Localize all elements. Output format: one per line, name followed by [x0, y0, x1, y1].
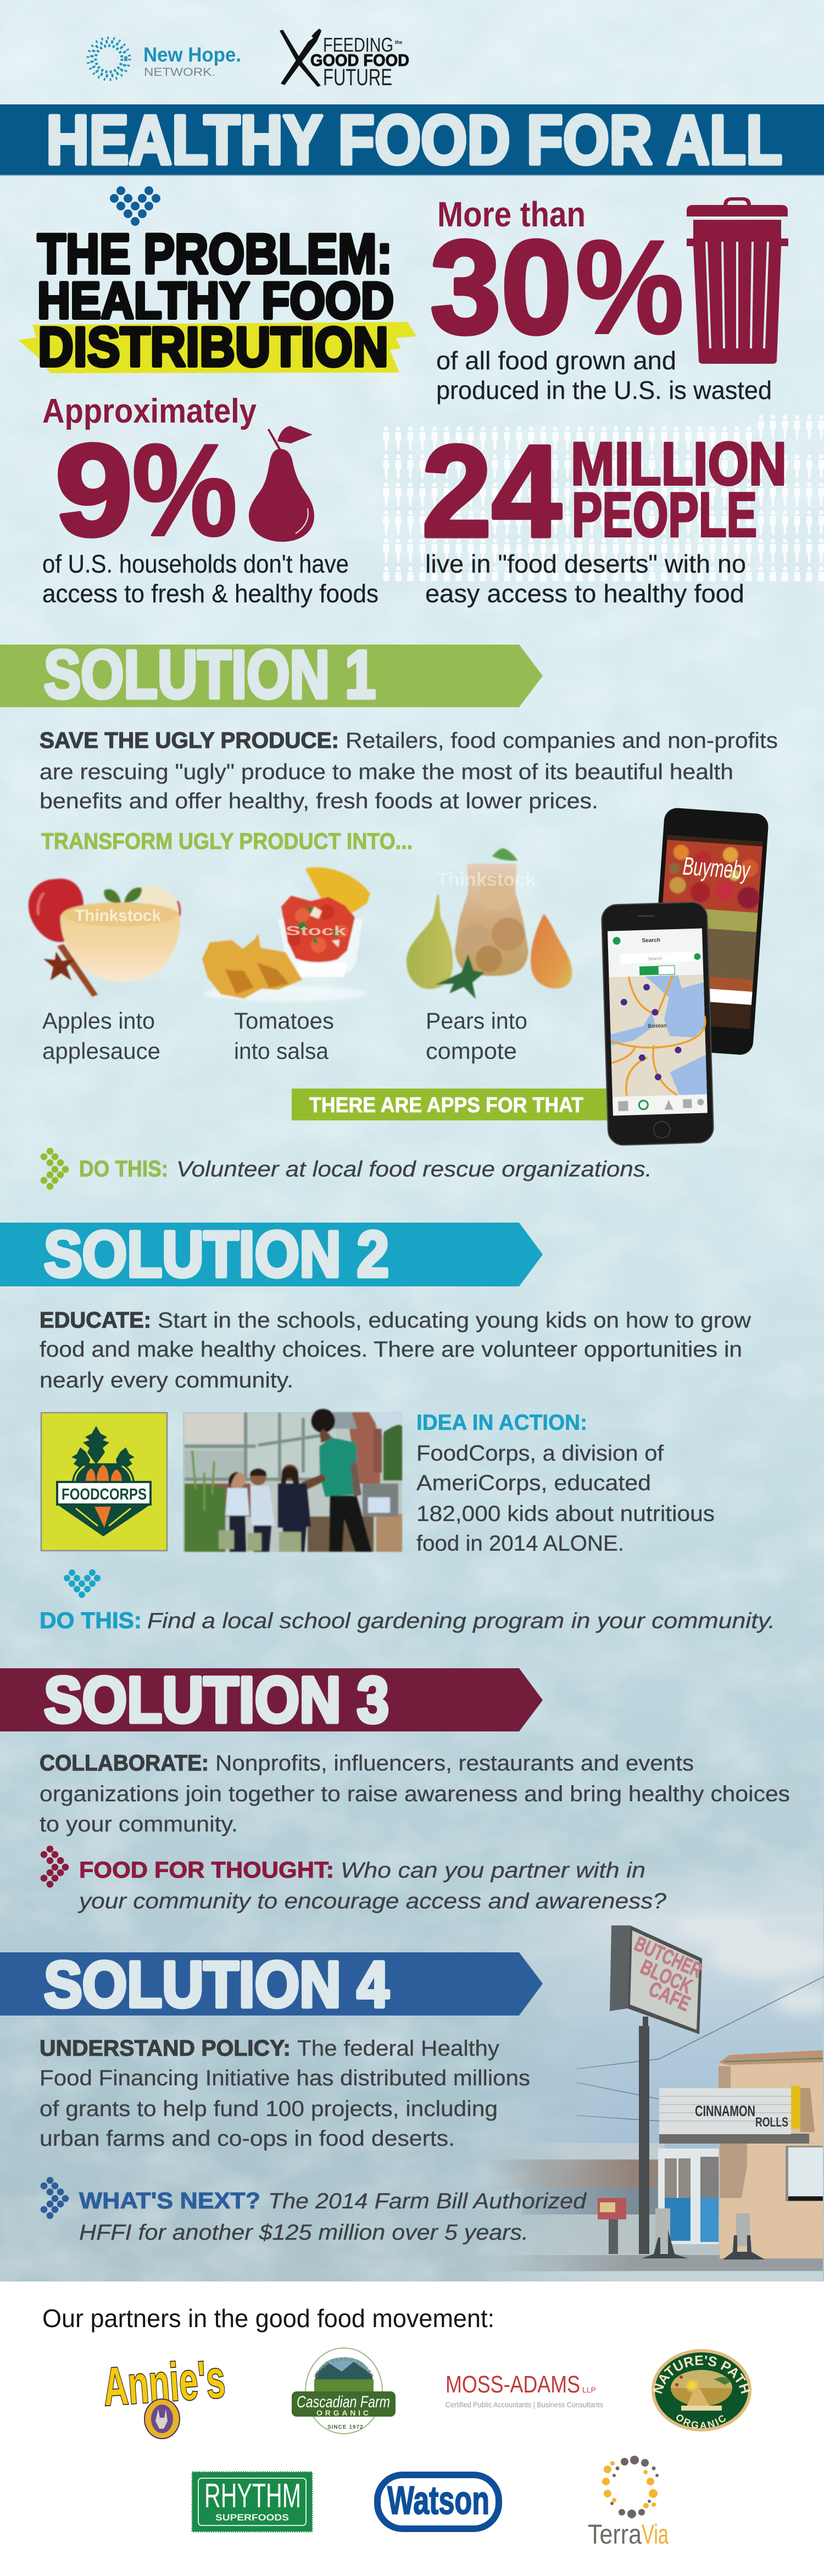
- cafe sign: CAFE: [645, 1978, 694, 2016]
- body text: urban farms and co-ops in food deserts.: [40, 2127, 455, 2151]
- banner arrow: [0, 1668, 543, 1731]
- body text: food and make healthy choices. There are volunteer opportunities in: [40, 1337, 742, 1362]
- marquee sign: CINNAMON: [695, 2102, 755, 2119]
- banner arrow: [0, 1952, 543, 2016]
- logo: Cascadian Farm: Cascadian Farm: [297, 2393, 390, 2411]
- logo: Annie's: Annie's: [101, 2348, 227, 2417]
- captions: Pears into: [426, 1008, 527, 1034]
- icon: pear: [249, 426, 314, 542]
- building: [598, 1925, 823, 2259]
- stat unit: PEOPLE: [572, 480, 757, 550]
- captions: [42, 1008, 527, 1064]
- map: Boston: [648, 1023, 667, 1030]
- app tab bar: [618, 1099, 704, 1111]
- logo wordmark: [143, 43, 241, 79]
- heading: the problem: HEALTHY FOOD: [37, 271, 394, 329]
- stat number: [55, 418, 237, 563]
- sidewalk signs: [642, 2208, 765, 2259]
- app search header: [613, 935, 701, 976]
- what's next callout: The 2014 Farm Bill Authorized: [268, 2189, 587, 2213]
- body text: are rescuing "ugly" produce to make the most of its beautiful health: [40, 760, 733, 784]
- body text: EDUCATE:: [40, 1307, 151, 1333]
- icon: diamond chevron: [41, 1846, 69, 1887]
- stat caption: access to fresh & healthy foods: [42, 579, 378, 608]
- what's next callout: WHAT'S NEXT?: [79, 2188, 260, 2213]
- what's next callout: HFFI for another $125 million over 5 years.: [79, 2220, 528, 2245]
- app search header: Search: [648, 956, 662, 961]
- do this callout: [41, 1148, 652, 1190]
- stock watermark: Stock: [286, 924, 347, 939]
- cafe sign: BUTCHER: [631, 1933, 705, 1983]
- heading: the problem: [18, 223, 416, 378]
- body text: Nonprofits, influencers, restaurants and events: [215, 1751, 694, 1775]
- photo: pears into compote: [407, 848, 572, 999]
- body text: The federal Healthy: [297, 2036, 499, 2061]
- body text: Food Financing Initiative has distributed millions: [40, 2066, 530, 2090]
- food for thought callout: Who can you partner with in: [341, 1858, 645, 1883]
- app search header: Search: [642, 937, 660, 944]
- do this callout: Find a local school gardening program in your community.: [147, 1609, 775, 1633]
- stat number: 30: [430, 213, 572, 362]
- stat caption: [425, 549, 746, 608]
- logo: Rhythm Superfoods: SUPERFOODS: [215, 2512, 289, 2523]
- stat caption: of U.S. households don't have: [42, 549, 349, 578]
- app logotype: Buymeby: [682, 852, 752, 885]
- logo: Nature's Path: [652, 2349, 751, 2431]
- people pattern: [381, 414, 824, 581]
- logo: Watson: [377, 2475, 499, 2529]
- stat lead-in: More than: [437, 195, 586, 234]
- logo: New Hope Network: [88, 38, 241, 80]
- captions: into salsa: [234, 1038, 329, 1064]
- logo: TerraVia: [588, 2456, 669, 2550]
- logo: Moss Adams: [446, 2371, 603, 2409]
- stat caption: of all food grown and: [436, 346, 676, 375]
- banner arrow: [0, 1223, 543, 1286]
- stat caption: easy access to healthy food: [425, 579, 744, 608]
- do this callout: DO THIS:: [40, 1607, 142, 1633]
- logo: Cascadian Farm: ORGANIC: [316, 2408, 370, 2417]
- logo: Nature's Path: NATURE'S PATH: [653, 2355, 750, 2394]
- captions: compote: [426, 1038, 517, 1064]
- stat caption: [42, 549, 378, 608]
- door: [658, 2148, 719, 2244]
- logo: Moss Adams: MOSS-ADAMS: [446, 2371, 580, 2398]
- stat number: %: [575, 213, 684, 362]
- strip below photo: [533, 2271, 823, 2281]
- logo wordmark: New Hope.: [143, 43, 241, 66]
- body text: of grants to help fund 100 projects, including: [40, 2097, 498, 2121]
- body text: benefits and offer healthy, fresh foods at lower prices.: [40, 789, 598, 813]
- body text: [40, 2035, 530, 2151]
- logo wordmark: [310, 34, 409, 91]
- logo: Rhythm Superfoods: RHYTHM: [204, 2477, 301, 2515]
- heading: SOLUTION 1: [44, 637, 376, 713]
- logo wordmark: the: [395, 40, 402, 45]
- yellow brush highlight: [18, 322, 416, 373]
- panel: solution 2: [0, 1218, 775, 1633]
- stat unit: [571, 430, 787, 550]
- logo: Watson: Watson: [387, 2479, 489, 2523]
- captions: applesauce: [42, 1038, 160, 1064]
- stat number: %: [132, 418, 237, 563]
- what's next callout: [79, 2188, 587, 2245]
- body text: nearly every community.: [40, 1368, 293, 1392]
- logo: FoodCorps: FOODCORPS: [62, 1486, 147, 1503]
- partners heading: Our partners in the good food movement:: [42, 2304, 494, 2333]
- logo: Feeding the Good Food Future: [280, 29, 409, 91]
- food for thought callout: [77, 1857, 667, 1913]
- captions: Apples into: [42, 1008, 155, 1034]
- window: [786, 2146, 823, 2201]
- stat: 24 million people: [381, 414, 824, 608]
- partners section: [42, 2304, 751, 2550]
- logo wordmark: FUTURE: [323, 64, 392, 91]
- logo wordmark: GOOD FOOD: [310, 51, 409, 70]
- stock watermark: Thinkstock: [75, 907, 161, 925]
- pole: [639, 2017, 649, 2254]
- stock watermark: Thinkstock: [437, 869, 536, 890]
- icon: ring of dots: [602, 2456, 659, 2518]
- body text: Retailers, food companies and non-profits: [346, 729, 778, 753]
- panel: solution 3: [0, 1664, 790, 1913]
- photo: Butcher Block Cafe streetscape: [497, 1873, 824, 2281]
- logo: Cascadian Farm: [292, 2347, 396, 2434]
- heading: SOLUTION 3: [44, 1664, 389, 1736]
- cafe sign: [610, 1925, 705, 2034]
- stat number: [430, 213, 684, 362]
- heading: SOLUTION 2: [44, 1218, 389, 1291]
- food for thought callout: your community to encourage access and awareness?: [77, 1889, 667, 1913]
- stat lead-in: Approximately: [42, 392, 257, 430]
- carrot leaves: [83, 1426, 109, 1464]
- small newspaper box: [598, 2198, 626, 2254]
- panel: solution 4: [0, 1948, 587, 2245]
- icon: New Hope sunburst: [88, 38, 130, 80]
- icon: trash can: [687, 197, 788, 364]
- phone: Buymeby app: [648, 807, 769, 1056]
- icon: diamond chevron: [41, 1148, 69, 1190]
- body text: UNDERSTAND POLICY:: [40, 2035, 291, 2061]
- stat number: 24: [422, 419, 561, 564]
- logo: TerraVia: Terra: [588, 2519, 642, 2550]
- captions: Tomatoes: [234, 1008, 334, 1034]
- body text: SAVE THE UGLY PRODUCE:: [40, 728, 339, 753]
- idea in action: FoodCorps, a division of: [416, 1441, 664, 1465]
- idea in action: 182,000 kids about nutritious: [416, 1502, 715, 1526]
- cafe sign: BLOCK: [637, 1956, 695, 1998]
- body text: COLLABORATE:: [40, 1750, 209, 1775]
- map: [609, 974, 708, 1097]
- heading: SOLUTION 4: [44, 1948, 389, 2021]
- stat: 9 percent of households: [42, 392, 378, 608]
- heading: the problem: DISTRIBUTION: [38, 317, 388, 378]
- logo: Nature's Path: ORGANIC: [676, 2414, 726, 2429]
- body text: [40, 728, 778, 813]
- logo: Cascadian Farm: SINCE 1972: [327, 2424, 364, 2430]
- body text: to your community.: [40, 1812, 238, 1836]
- stat caption: live in "food deserts" with no: [425, 549, 746, 578]
- icon: dotted heart: [110, 186, 160, 226]
- title banner: [0, 101, 824, 179]
- call to action: Volunteer at local food rescue organizations.: [176, 1157, 652, 1181]
- logo wordmark: NETWORK.: [144, 66, 215, 79]
- photo: kids gardening: [183, 1409, 402, 1552]
- icon: diamond heart: [64, 1569, 101, 1598]
- call to action: DO THIS:: [79, 1156, 168, 1181]
- body text: [40, 1750, 790, 1836]
- icon: crossed knife and fork: [280, 29, 321, 87]
- stat number: 9: [55, 418, 133, 563]
- photo: tomatoes into salsa: [202, 867, 370, 1001]
- stat unit: MILLION: [571, 430, 787, 498]
- banner arrow: [0, 645, 543, 707]
- callout: there are apps for that: [292, 1089, 610, 1120]
- marquee sign: ROLLS: [755, 2115, 788, 2130]
- idea in action: [416, 1411, 715, 1556]
- logo: TerraVia: Via: [642, 2519, 669, 2550]
- stat caption: [436, 346, 772, 404]
- phone: map search app: [602, 902, 714, 1146]
- sky and distant background: [497, 1873, 824, 2272]
- panel: solution 1: [0, 637, 778, 1190]
- logo: Moss Adams: LLP: [582, 2385, 596, 2394]
- idea in action: AmeriCorps, educated: [416, 1471, 651, 1495]
- marquee sign: [659, 2086, 800, 2134]
- icon: diamond chevron: [41, 2177, 69, 2219]
- body text: organizations join together to raise awareness and bring healthy choices: [40, 1782, 790, 1806]
- stat: 30 percent wasted: [430, 195, 788, 404]
- food for thought callout: FOOD FOR THOUGHT:: [79, 1857, 334, 1883]
- logo: Moss Adams: Certified Public Accountants | Business Consultants: [446, 2400, 603, 2409]
- logo: Rhythm Superfoods: [192, 2472, 312, 2531]
- subheading: TRANSFORM UGLY PRODUCT INTO...: [41, 828, 413, 854]
- idea in action: IDEA IN ACTION:: [416, 1411, 587, 1435]
- logo: Annie's: [101, 2348, 227, 2439]
- logo: Cascadian Farm: UPPER SKAGIT VALLEY: [314, 2357, 374, 2377]
- body text: Start in the schools, educating young kids on how to grow: [158, 1308, 751, 1333]
- callout: there are apps for that: THERE ARE APPS FOR THAT: [309, 1093, 583, 1117]
- idea in action: food in 2014 ALONE.: [416, 1531, 624, 1556]
- logo: FoodCorps: [41, 1413, 167, 1551]
- body text: [40, 1307, 751, 1392]
- photo: apples into applesauce: [29, 879, 180, 997]
- heading: the problem: THE PROBLEM:: [37, 223, 392, 285]
- stat caption: produced in the U.S. is wasted: [436, 376, 772, 404]
- logo wordmark: FEEDING: [323, 34, 393, 56]
